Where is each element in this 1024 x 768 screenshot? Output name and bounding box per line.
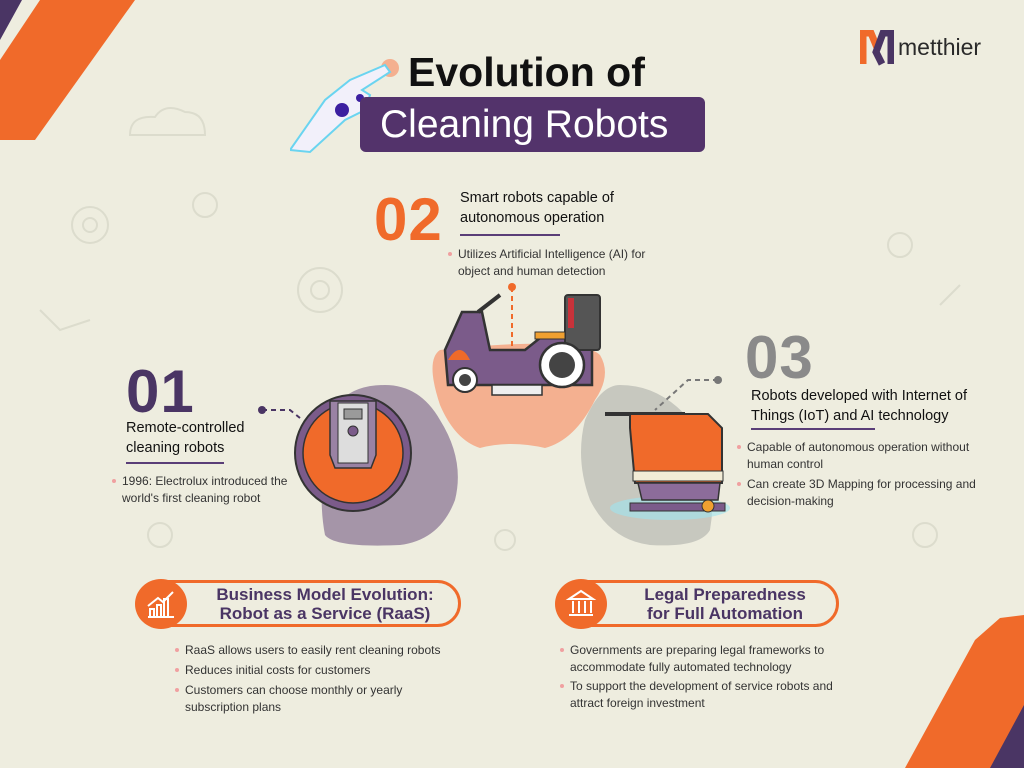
icon: building xyxy=(555,579,607,629)
panel: RaaS: Reduces initial costs for customers xyxy=(185,663,370,677)
icon: chart xyxy=(135,579,187,629)
section 02: Smart robots capable of autonomous operation xyxy=(460,190,614,226)
panel: RaaS xyxy=(135,579,461,714)
section 02: Utilizes Artificial Intelligence (AI) for object and human detection xyxy=(458,247,645,278)
icon: walk-behind floor scrubber xyxy=(605,412,730,520)
blob purple xyxy=(322,385,458,546)
section 03: Robots developed with Internet of Things (IoT) and AI technology xyxy=(751,388,967,424)
section 02: 02 xyxy=(374,186,443,253)
section 03: Can create 3D Mapping for processing and decision-making xyxy=(747,477,976,508)
panel: RaaS: Robot as a Service (RaaS) xyxy=(220,604,430,623)
blob orange xyxy=(432,344,605,448)
section 01 xyxy=(112,358,287,505)
section 01: Remote-controlled cleaning robots xyxy=(126,420,244,456)
panel: RaaS: Business Model Evolution: xyxy=(216,585,434,604)
panel: Legal: To support the development of service robots and attract foreign investment xyxy=(570,679,833,710)
title xyxy=(290,49,705,153)
title: Evolution of xyxy=(408,49,645,95)
dashed connectors xyxy=(262,410,300,418)
panel: Legal xyxy=(555,579,839,710)
icon: ride-on scrubber xyxy=(444,293,601,396)
panel: Legal: for Full Automation xyxy=(647,604,803,623)
blob grey xyxy=(581,385,712,545)
icon: round robot vacuum xyxy=(294,394,412,512)
panel: Legal: Governments are preparing legal frameworks to accommodate fully automated technology xyxy=(570,643,824,674)
logo xyxy=(860,30,981,66)
panel: RaaS: RaaS allows users to easily rent cleaning robots xyxy=(185,643,440,657)
panel: RaaS: Customers can choose monthly or yearly subscription plans xyxy=(185,683,402,714)
panel: Legal: Legal Preparedness xyxy=(644,585,806,604)
icon: robot hand xyxy=(290,59,399,153)
logo: metthier xyxy=(898,34,981,60)
title: Cleaning Robots xyxy=(380,103,668,146)
section 03 xyxy=(737,324,976,508)
section 01: 1996: Electrolux introduced the world's first cleaning robot xyxy=(122,474,287,505)
section 01: 01 xyxy=(126,358,195,425)
section 03: 03 xyxy=(745,324,814,391)
section 03: Capable of autonomous operation without human control xyxy=(747,440,969,471)
section 02 xyxy=(374,186,646,278)
